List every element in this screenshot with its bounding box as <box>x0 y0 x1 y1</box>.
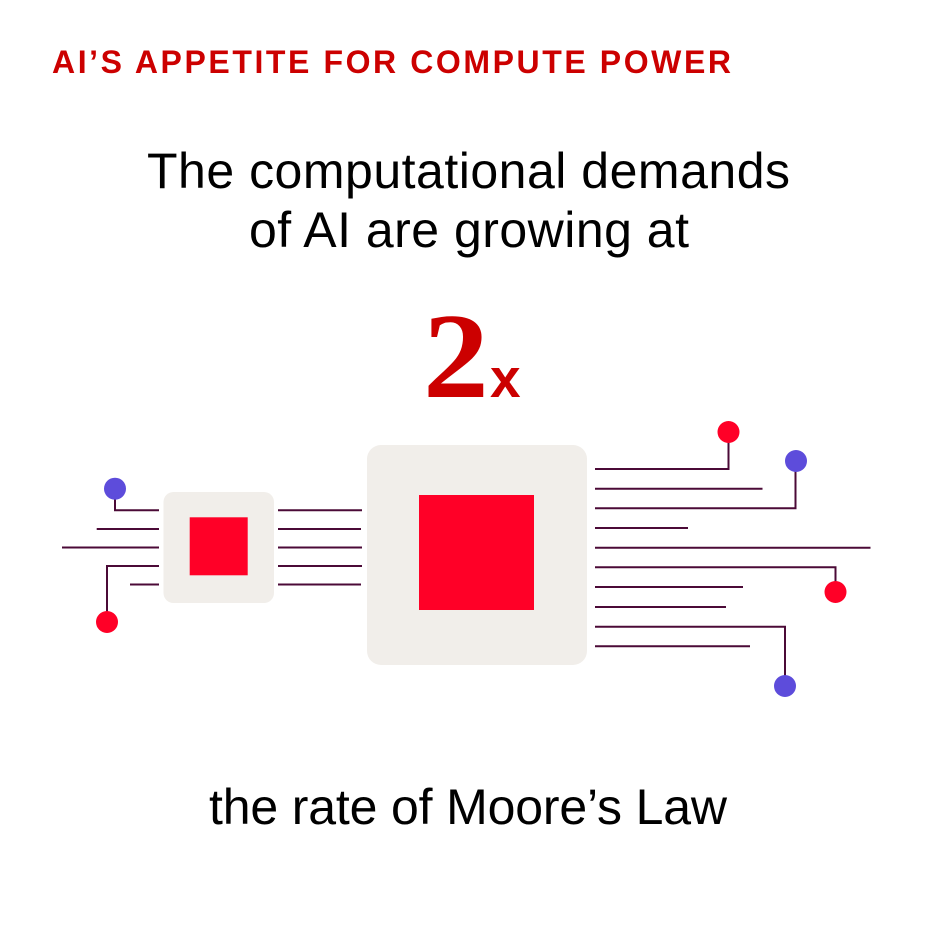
heading text: The computational demands <box>147 143 790 199</box>
icon: small chip left nodes <box>96 478 126 633</box>
large chip <box>367 445 587 665</box>
small chip left traces <box>62 489 159 622</box>
stat: 2x <box>423 289 521 424</box>
heading text: of AI are growing at <box>249 202 689 258</box>
chip diagram <box>62 421 870 697</box>
stat: 2x: 2 <box>423 289 489 424</box>
caption text: the rate of Moore’s Law <box>209 779 728 835</box>
icon: large chip right nodes <box>718 421 846 697</box>
title: AI’S APPETITE FOR COMPUTE POWER <box>52 44 731 80</box>
traces between chips <box>278 510 362 584</box>
heading text <box>147 143 790 258</box>
stat: 2x: x <box>490 347 521 409</box>
large chip right traces <box>595 432 870 686</box>
small chip <box>164 492 274 603</box>
